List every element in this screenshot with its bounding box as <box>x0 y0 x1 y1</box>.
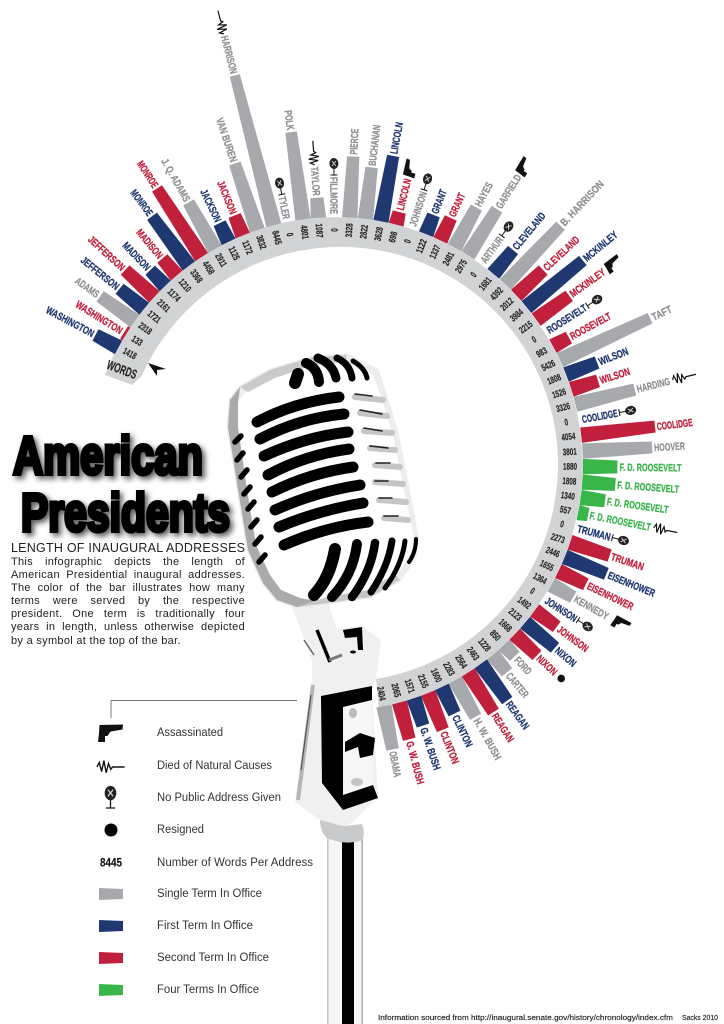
bar: Eisenhower second term: EISENHOWER <box>585 581 635 613</box>
bar: Obama: OBAMA <box>386 750 403 779</box>
bar: Reagan first term <box>463 643 533 733</box>
bar: F. D. Roosevelt first term: 1880 <box>563 462 577 473</box>
legend item: resigned <box>104 824 204 836</box>
legend item: number of words per address: 8445 <box>100 856 122 870</box>
bar: Fillmore, no public address: 0 <box>328 228 339 232</box>
bar: Washington first term: 1418 <box>121 346 138 362</box>
bar: Washington second term: WASHINGTON <box>73 299 125 337</box>
bar: Roosevelt first term, no public address: ROOSEVELT <box>545 302 590 337</box>
bar: Jackson second term <box>213 178 257 257</box>
bar: Tyler, no public address: 0 <box>283 232 295 238</box>
bar: Adams: 2318 <box>136 320 154 338</box>
bar: Nixon second term, resigned <box>495 615 569 687</box>
bar: J. Q. Adams <box>157 155 232 270</box>
bar: Kennedy, assassinated: KENNEDY <box>572 594 611 623</box>
bar: Wilson second term <box>550 364 632 403</box>
bar: Eisenhower first term <box>543 542 658 601</box>
bar: J. Q. Adams: J. Q. ADAMS <box>158 157 192 204</box>
legend item: second term in office <box>99 952 269 964</box>
legend item: resigned: Resigned <box>157 824 204 836</box>
bar: Carter: 1228 <box>475 636 493 654</box>
bar: Truman second term: TRUMAN <box>609 551 645 573</box>
legend <box>97 724 313 996</box>
description text block: by a symbol at the top of the bar. <box>11 635 181 647</box>
bar: H. W. Bush: H. W. BUSH <box>471 716 503 762</box>
bar: Hayes <box>438 179 497 269</box>
bar: McKinley first term <box>506 227 621 326</box>
legend item: first term in office: First Term In Office <box>157 920 253 932</box>
bar: Clinton first term <box>426 666 477 750</box>
bar: Ford: 850 <box>487 628 503 644</box>
bar: McKinley first term: 3984 <box>508 307 526 324</box>
bar: F. D. Roosevelt second term: F. D. ROOSEVELT <box>617 479 680 496</box>
bar: Clinton second term <box>414 672 463 766</box>
legend item: assassinated <box>98 724 223 742</box>
bar: Pierce <box>341 128 362 238</box>
bar: Johnson second term: JOHNSON <box>555 624 591 655</box>
bar: F. D. Roosevelt fourth term, died of natural causes <box>559 501 679 540</box>
bar: H. W. Bush: 2283 <box>440 660 457 678</box>
bar: Jackson first term: 1125 <box>226 245 242 263</box>
bar: Jefferson second term: JEFFERSON <box>85 234 127 274</box>
bar: Arthur, no public address: ARTHUR <box>479 234 506 266</box>
bar: Garfield, assassinated: GARFIELD <box>494 172 524 211</box>
bar: Grant second term: GRANT <box>447 191 468 219</box>
bar: Lincoln second term, assassinated <box>384 158 420 244</box>
bar: H. W. Bush <box>439 659 506 763</box>
legend item: four terms in office <box>99 984 259 996</box>
bar: Taft: 5426 <box>540 358 557 374</box>
bar: Jefferson first term <box>77 253 165 327</box>
bar: Reagan first term: 2463 <box>464 645 481 663</box>
bar: Jefferson second term <box>85 232 174 316</box>
bar: Nixon second term, resigned: NIXON <box>534 653 559 678</box>
bar: Tyler, no public address <box>272 177 295 238</box>
bar: Polk: 4801 <box>298 225 310 240</box>
legend item: second term in office: Second Term In Office <box>157 952 269 964</box>
subtitle: LENGTH OF INAUGURAL ADDRESSES <box>11 541 245 555</box>
bar: Grant second term <box>425 190 469 262</box>
bar: Taft: TAFT <box>650 304 674 323</box>
bar: Hayes: 2481 <box>441 250 457 268</box>
bar: G. W. Bush second term: G. W. BUSH <box>403 740 426 786</box>
bar: Wilson first term: 1808 <box>546 372 563 388</box>
bar: Buchanan: 2822 <box>358 224 371 239</box>
bar: Buchanan: BUCHANAN <box>367 124 383 166</box>
bar: Johnson, no public address: 0 <box>402 238 414 245</box>
legend item: died of natural causes <box>97 760 272 773</box>
description text block: This infographic depicts the length of <box>11 556 245 568</box>
bar: G. W. Bush second term <box>387 681 429 786</box>
bar: Jefferson second term: 2161 <box>154 297 173 315</box>
bar: Lincoln second term, assassinated: 698 <box>387 231 400 244</box>
bar: Johnson first term, no public address: 0 <box>528 586 537 597</box>
bar: Arthur, no public address <box>468 219 517 280</box>
bar: Washington first term: WASHINGTON <box>44 304 96 340</box>
bar: Coolidge second term <box>561 414 693 445</box>
bar: Truman first term, no public address: 0 <box>559 519 565 531</box>
description text block: The color of the bar illustrates how many <box>11 582 245 594</box>
bar: Cleveland second term <box>496 232 583 315</box>
bar: G. W. Bush second term: 2065 <box>388 682 403 699</box>
legend item: single term in office <box>99 888 262 900</box>
bar: B. Harrison: B. HARRISON <box>558 178 607 229</box>
bar: Carter <box>474 635 533 701</box>
legend item: no public address given <box>105 786 281 808</box>
bar: Reagan second term <box>451 652 518 745</box>
bar: Kennedy, assassinated: 1364 <box>531 571 549 588</box>
semicircular word-count ring <box>105 217 582 707</box>
bar: Garfield, assassinated <box>451 155 535 276</box>
bar: Harrison, died of natural causes: HARRISON <box>218 34 239 75</box>
bar: Van Buren <box>212 116 271 251</box>
bar: Coolidge first term, no public address: 0 <box>564 417 569 429</box>
bar: Jackson second term: 1172 <box>239 239 255 256</box>
bar: Madison first term: 1174 <box>165 287 183 305</box>
bar: Arthur, no public address: 0 <box>469 270 480 280</box>
bar: Reagan second term: 2564 <box>452 653 469 671</box>
bar: Truman first term, no public address <box>559 519 630 548</box>
icon: start arrow <box>148 363 166 376</box>
bar: Monroe first term: 3368 <box>187 268 205 285</box>
microphone illustration <box>228 355 417 1024</box>
mic head <box>228 355 417 607</box>
bar: Jefferson first term: 1721 <box>145 309 163 326</box>
radial bar chart: words per inaugural address <box>43 9 698 786</box>
bar: B. Harrison <box>486 177 607 304</box>
bar: Clinton second term: 2155 <box>415 673 431 690</box>
bar: Harrison, died of natural causes: 8445 <box>269 230 284 246</box>
bar: F. D. Roosevelt first term <box>563 459 682 475</box>
bar: Hoover: 3801 <box>562 447 577 458</box>
bar: Buchanan <box>355 124 384 240</box>
bar: Monroe second term: 4458 <box>200 259 216 277</box>
bar: Monroe first term: MONROE <box>128 188 155 219</box>
mic grille: bottom slats <box>314 539 416 597</box>
bar: Clinton second term: CLINTON <box>437 730 461 766</box>
mic stand collar <box>320 818 364 843</box>
bar: Nixon first term <box>505 604 580 670</box>
bar: Ford: FORD <box>511 655 534 678</box>
bar: Cleveland second term: CLEVELAND <box>541 234 583 274</box>
mic grille: left slats <box>235 436 265 562</box>
bar: Grant second term: 1337 <box>428 244 443 261</box>
bar: Roosevelt first term, no public address: 0 <box>530 334 539 345</box>
bar: Coolidge second term: 4054 <box>561 431 577 444</box>
source note: Sacks 2010 <box>682 1015 718 1022</box>
bar: Harrison, died of natural causes <box>210 9 286 247</box>
bar: F. D. Roosevelt fourth term, died of natural causes: 557 <box>559 504 572 517</box>
bar: Truman second term <box>549 529 646 574</box>
bar: Washington first term <box>43 302 140 364</box>
bar: Truman first term, no public address: TRUMAN <box>576 523 612 544</box>
bar: Cleveland first term: 1681 <box>477 275 495 293</box>
bar: Nixon second term, resigned: 1668 <box>496 617 514 635</box>
mic grille: main slats <box>257 397 368 545</box>
description text block: years in length, unless otherwise depicted <box>11 621 245 633</box>
bar: Lincoln first term: 3628 <box>373 226 386 242</box>
bar: Jefferson first term: JEFFERSON <box>78 254 121 293</box>
bar: F. D. Roosevelt fourth term, died of natural causes: F. D. ROOSEVELT <box>589 510 652 534</box>
bar: Madison second term: 1210 <box>176 277 193 295</box>
legend item: four terms in office: Four Terms In Office <box>157 984 259 996</box>
bar: G. W. Bush first term <box>400 677 445 772</box>
bar: J. Q. Adams: 2911 <box>212 252 229 270</box>
bar: Coolidge first term, no public address <box>564 404 637 429</box>
bar: Coolidge first term, no public address: COOLIDGE <box>581 408 619 426</box>
bar: Kennedy, assassinated <box>530 568 632 635</box>
bar: G. W. Bush first term: 1571 <box>402 678 417 695</box>
bar: Wilson first term: WILSON <box>597 346 630 368</box>
bar: Obama: 2404 <box>374 686 388 702</box>
legend item: assassinated: Assassinated <box>157 727 223 739</box>
bar: Taylor, died of natural causes <box>305 140 327 238</box>
bar: Tyler, no public address: TYLER <box>276 195 292 221</box>
bar: Fillmore, no public address: FILLMORE <box>327 177 339 214</box>
title <box>13 427 230 543</box>
bar: Lincoln first term <box>370 121 407 242</box>
description text block: terms were served by the respective <box>11 595 245 607</box>
bar: McKinley first term: MCKINLEY <box>581 229 620 264</box>
bar: McKinley second term, assassinated: 2215 <box>517 319 535 336</box>
bar: Polk <box>281 109 313 241</box>
legend connector line <box>111 700 297 718</box>
bar: Eisenhower second term <box>537 556 637 614</box>
bar: F. D. Roosevelt second term: 1808 <box>562 476 577 488</box>
bar: Pierce: 3328 <box>344 223 356 238</box>
bar: Jackson first term: JACKSON <box>197 188 223 224</box>
bar: Nixon first term: NIXON <box>552 645 578 670</box>
bar: Grant first term: GRANT <box>429 188 450 216</box>
bar: Cleveland first term <box>475 208 549 294</box>
bar: Clinton first term: 1600 <box>428 667 444 684</box>
bar: Harding, died of natural causes <box>554 367 698 417</box>
bar: Johnson first term, no public address: JOHNSON <box>542 595 579 625</box>
bar: Pierce: PIERCE <box>348 128 362 155</box>
legend item: died of natural causes: Died of Natural Causes <box>157 760 272 772</box>
bar: Madison first term <box>119 238 185 306</box>
bar: Washington second term: 133 <box>129 334 144 349</box>
bar: Madison second term: MADISON <box>133 227 165 261</box>
bar: Wilson first term <box>545 343 631 389</box>
bar: F. D. Roosevelt third term: F. D. ROOSEVELT <box>606 496 670 516</box>
bar: Adams <box>72 273 155 339</box>
bar: Lincoln second term, assassinated: LINCOLN <box>395 178 414 212</box>
bar: Johnson second term: 1492 <box>515 595 533 612</box>
mic stand pole <box>327 836 363 1024</box>
bar: Harding, died of natural causes: 3326 <box>555 401 571 415</box>
bar: Ford <box>486 626 536 678</box>
source note: Information sourced from http://inaugural.senate.gov/history/chronology/index.cfm <box>378 1015 673 1022</box>
bar: Grant first term <box>412 187 451 255</box>
mic grille: right slats <box>355 394 408 520</box>
legend item: single term in office: Single Term In Office <box>157 888 262 900</box>
bar: Taylor, died of natural causes: TAYLOR <box>308 166 322 196</box>
bar: Monroe first term <box>127 186 207 286</box>
legend item: first term in office <box>99 920 253 932</box>
bar: F. D. Roosevelt third term: 1340 <box>560 490 575 503</box>
bar: F. D. Roosevelt third term <box>560 487 670 517</box>
legend item: no public address given: No Public Address Given <box>157 792 281 804</box>
bar: F. D. Roosevelt second term <box>562 473 680 497</box>
bar: Wilson second term: 1526 <box>551 387 568 401</box>
description text block <box>11 556 245 647</box>
bar: McKinley second term, assassinated <box>516 253 625 337</box>
description text block: American Presidential inaugural addresses. <box>11 569 245 581</box>
bar: Hoover: HOOVER <box>654 441 686 454</box>
bar: Cleveland first term: CLEVELAND <box>510 210 549 253</box>
bar: Truman second term: 2273 <box>549 531 566 546</box>
bar: Johnson, no public address <box>402 172 436 245</box>
title: American <box>13 427 203 486</box>
mic grille: top slats <box>295 358 367 383</box>
bar: Carter: CARTER <box>503 670 531 701</box>
bar: G. W. Bush first term: G. W. BUSH <box>417 726 443 772</box>
bar: Roosevelt second term: ROOSEVELT <box>568 310 614 343</box>
bar: Nixon first term: 2123 <box>506 606 524 624</box>
bar: Van Buren: 3832 <box>253 234 268 251</box>
bar: Harding, died of natural causes: HARDING <box>636 376 671 396</box>
bar: Lincoln first term: LINCOLN <box>388 121 406 155</box>
bar: Jackson second term: JACKSON <box>214 179 239 216</box>
bar: Johnson, no public address: JOHNSON <box>407 190 430 228</box>
bar: Roosevelt first term, no public address <box>530 292 605 346</box>
bar: Grant first term: 1122 <box>414 238 430 255</box>
bar: Johnson second term <box>514 593 592 656</box>
description text block: president. One term is traditionally four <box>11 608 245 620</box>
bar: Adams: ADAMS <box>72 275 101 301</box>
bar: Taft <box>539 301 675 375</box>
bar: Van Buren: VAN BUREN <box>213 116 239 164</box>
bar: Obama <box>373 685 406 779</box>
bar: Roosevelt second term <box>533 308 614 362</box>
bar: Madison first term: MADISON <box>120 240 153 273</box>
bar: Madison second term <box>133 225 195 296</box>
bar: Monroe second term <box>133 157 219 278</box>
bar: Monroe second term: MONROE <box>134 159 160 191</box>
bar: Clinton first term: CLINTON <box>449 713 475 749</box>
bar: Hayes: HAYES <box>473 180 496 209</box>
bar: Coolidge second term: COOLIDGE <box>656 417 693 433</box>
legend item: number of words per address <box>100 856 313 870</box>
bar: Roosevelt second term: 983 <box>535 346 549 360</box>
bar: Reagan first term: REAGAN <box>503 699 531 732</box>
bar: Johnson first term, no public address <box>527 586 595 635</box>
bar: Jackson first term <box>197 187 244 263</box>
bar: Eisenhower second term: 1655 <box>538 558 556 574</box>
bar: Hoover <box>562 438 686 460</box>
bar: Taylor, died of natural causes: 1087 <box>313 223 325 238</box>
bar: B. Harrison: 4392 <box>488 285 506 303</box>
bar: Eisenhower first term: EISENHOWER <box>606 570 657 600</box>
bar: Garfield, assassinated: 2975 <box>453 257 470 275</box>
title: Presidents <box>21 484 230 543</box>
bar: Eisenhower first term: 2446 <box>544 545 561 560</box>
bar: F. D. Roosevelt first term: F. D. ROOSEVELT <box>619 462 682 474</box>
bar: Cleveland second term: 2012 <box>498 296 516 313</box>
mic body <box>292 602 381 826</box>
bar: Reagan second term: REAGAN <box>489 711 516 745</box>
ring start label: words: WORDS <box>105 357 139 382</box>
bar: Polk: POLK <box>281 110 296 131</box>
bar: Wilson second term: WILSON <box>598 366 632 387</box>
bar: McKinley second term, assassinated: MCKINLEY <box>568 266 608 300</box>
legend item: number of words per address: Number of Words Per Address <box>157 857 313 869</box>
